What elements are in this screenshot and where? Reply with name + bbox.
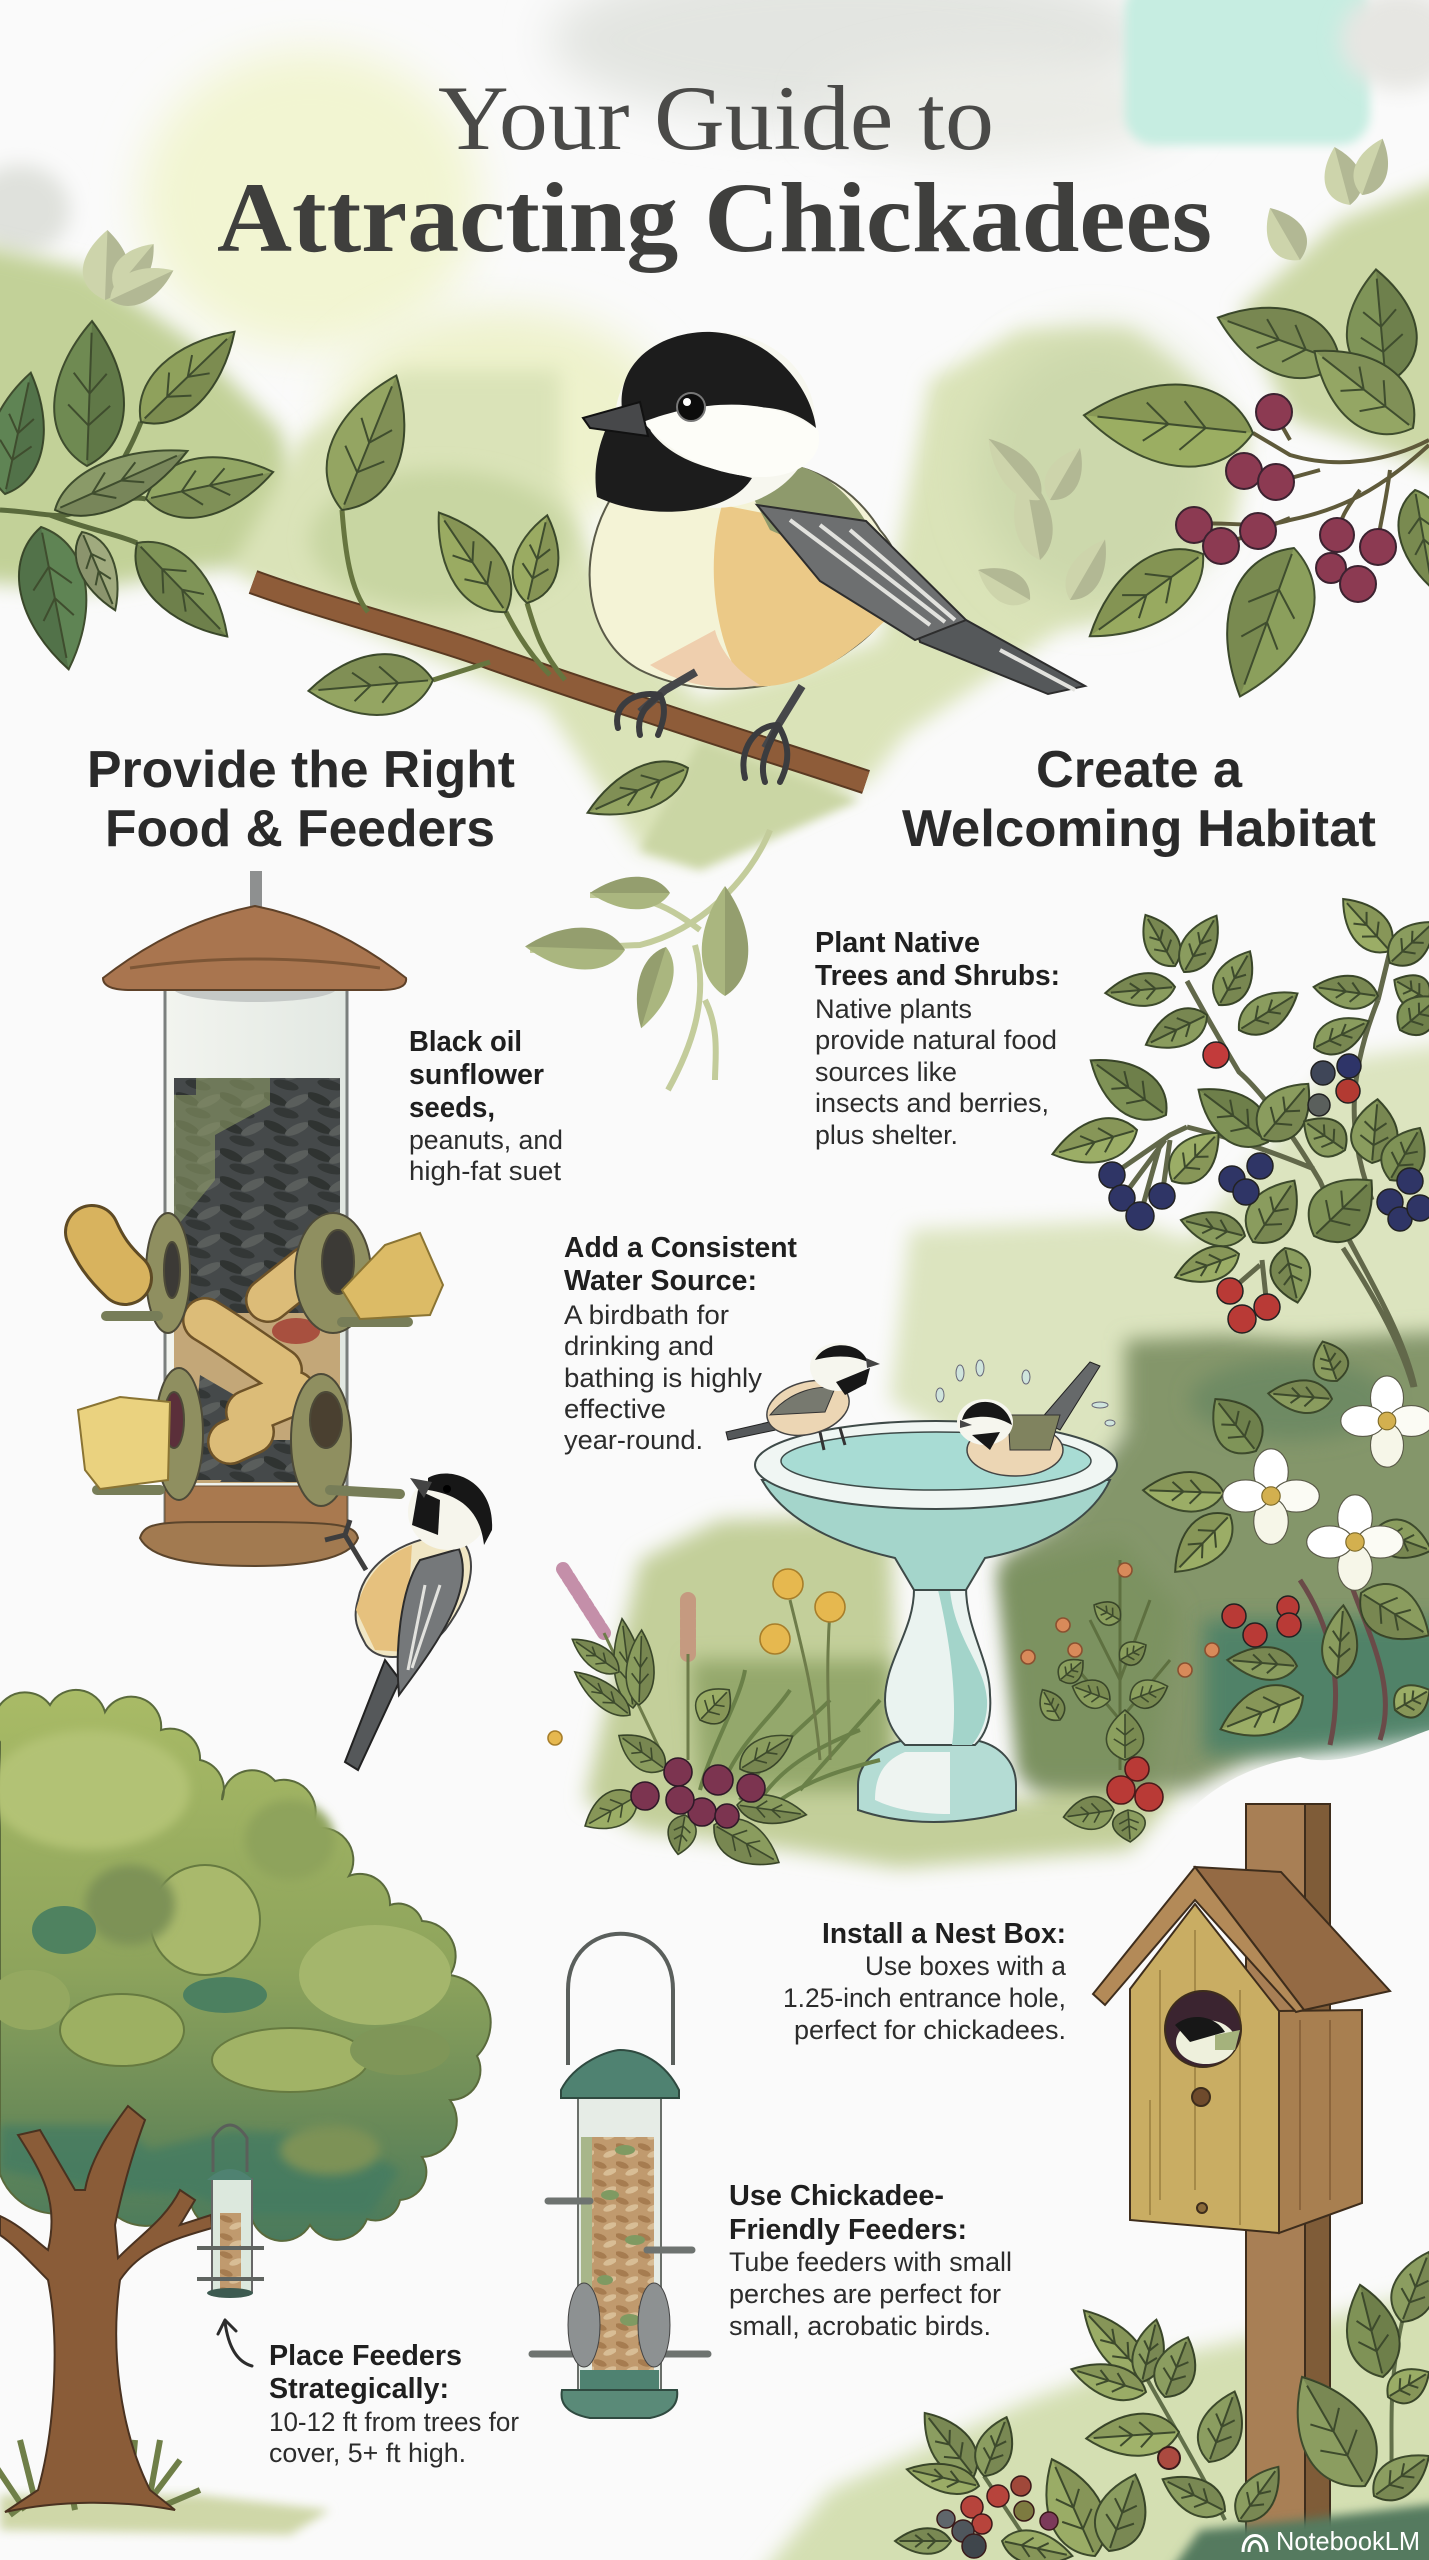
garden background wash xyxy=(585,1040,1429,1868)
text: tube feeders: Tube feeders with small xyxy=(729,2247,1012,2277)
text: nest box: Use boxes with a xyxy=(865,1951,1067,1981)
title: Your Guide to xyxy=(438,67,994,169)
NotebookLM watermark: NotebookLM xyxy=(1276,2526,1420,2556)
ground and grass xyxy=(0,2440,330,2535)
section heading: food and feeders xyxy=(87,741,515,858)
text: tube feeders: Use Chickadee- xyxy=(729,2180,944,2212)
bathing chickadee with splashes xyxy=(936,1360,1115,1476)
text: tube feeders xyxy=(729,2180,1012,2341)
text: food tip: peanuts, and xyxy=(409,1125,563,1155)
text: food tip xyxy=(409,1026,563,1186)
chickadee clinging to feeder xyxy=(325,1474,492,1770)
entrance hole with bird xyxy=(1165,1991,1241,2067)
birdbath xyxy=(755,1421,1117,1822)
roof xyxy=(103,906,406,990)
main branch with leaves xyxy=(253,362,866,832)
text: place feeders: cover, 5+ ft high. xyxy=(269,2438,466,2468)
arrow to feeder xyxy=(218,2320,252,2366)
text: water source: Water Source: xyxy=(564,1265,757,1297)
text: tube feeders: small, acrobatic birds. xyxy=(729,2311,991,2341)
tray xyxy=(140,1522,358,1566)
canopy lobes xyxy=(0,1730,451,2215)
text: nest box: perfect for chickadees. xyxy=(794,2015,1066,2045)
right berry branch xyxy=(1072,266,1429,710)
title: Attracting Chickadees xyxy=(217,162,1212,273)
text: place feeders: 10-12 ft from trees for xyxy=(269,2407,519,2437)
small chickadee on rim xyxy=(726,1343,880,1450)
suet cubes xyxy=(342,1233,443,1319)
title xyxy=(217,67,1212,273)
text: plant native: Plant Native xyxy=(815,927,980,959)
text: water source: drinking and xyxy=(564,1331,714,1361)
text: water source: Add a Consistent xyxy=(564,1232,797,1264)
text: water source: bathing is highly xyxy=(564,1363,762,1393)
text: water source: year-round. xyxy=(564,1425,703,1455)
large seed feeder xyxy=(78,871,443,1566)
text: food tip: Black oil xyxy=(409,1026,522,1058)
left leafy branch xyxy=(0,312,279,676)
section heading: welcoming habitat xyxy=(902,741,1376,858)
text: food tip: high-fat suet xyxy=(409,1156,562,1186)
feeder tube xyxy=(165,978,347,1532)
canopy silhouette xyxy=(0,1690,491,2241)
chickadee-friendly tube feeder xyxy=(532,1934,708,2418)
text: plant native: Trees and Shrubs: xyxy=(815,960,1060,992)
text: plant native: plus shelter. xyxy=(815,1120,958,1150)
nest box on post xyxy=(1093,1804,1390,2556)
section heading: welcoming habitat: Welcoming Habitat xyxy=(902,800,1376,858)
text: nest box: 1.25-inch entrance hole, xyxy=(783,1983,1066,2013)
text: nest box xyxy=(783,1918,1067,2045)
bottom right plants xyxy=(895,2244,1429,2560)
small feeder in tree xyxy=(197,2125,264,2298)
foreground flowers and shrubs xyxy=(548,1560,1219,1880)
text: plant native: sources like xyxy=(815,1057,957,1087)
text: place feeders: Strategically: xyxy=(269,2373,449,2405)
text: tube feeders: Friendly Feeders: xyxy=(729,2214,967,2246)
text: food tip: sunflower xyxy=(409,1059,544,1091)
text: food tip: seeds, xyxy=(409,1092,495,1124)
section heading: food and feeders: Provide the Right xyxy=(87,741,515,799)
text: water source: A birdbath for xyxy=(564,1300,729,1330)
trunk and limbs xyxy=(0,2106,212,2512)
feeding ports xyxy=(146,1213,371,1506)
text: place feeders xyxy=(269,2340,519,2468)
text: water source: effective xyxy=(564,1394,666,1424)
flowering dogwood xyxy=(1142,1336,1429,1751)
text: plant native: Native plants xyxy=(815,994,972,1024)
text: place feeders: Place Feeders xyxy=(269,2340,462,2372)
hanging pale sprig xyxy=(524,830,770,1090)
text: water source xyxy=(564,1232,797,1455)
outer peanut xyxy=(92,1232,125,1278)
berries xyxy=(1099,1042,1429,1333)
bottom foliage wash xyxy=(740,2280,1429,2560)
text: plant native: insects and berries, xyxy=(815,1088,1049,1118)
text: nest box: Install a Nest Box: xyxy=(822,1918,1066,1950)
section heading: welcoming habitat: Create a xyxy=(1036,741,1243,799)
text: plant native: provide natural food xyxy=(815,1025,1057,1055)
top watercolor wash xyxy=(0,0,1429,870)
perches xyxy=(97,1316,408,1494)
faint background sprigs xyxy=(82,133,1398,614)
tree with canopy xyxy=(0,1690,491,2535)
blueberry shrub xyxy=(1047,887,1429,1387)
text: plant native xyxy=(815,927,1060,1150)
main chickadee on branch xyxy=(583,332,1085,782)
text: tube feeders: perches are perfect for xyxy=(729,2279,1001,2309)
peanuts inside xyxy=(205,1268,308,1442)
section heading: food and feeders: Food & Feeders xyxy=(105,800,495,858)
white cut-out below shrubs xyxy=(1170,1730,1429,1840)
